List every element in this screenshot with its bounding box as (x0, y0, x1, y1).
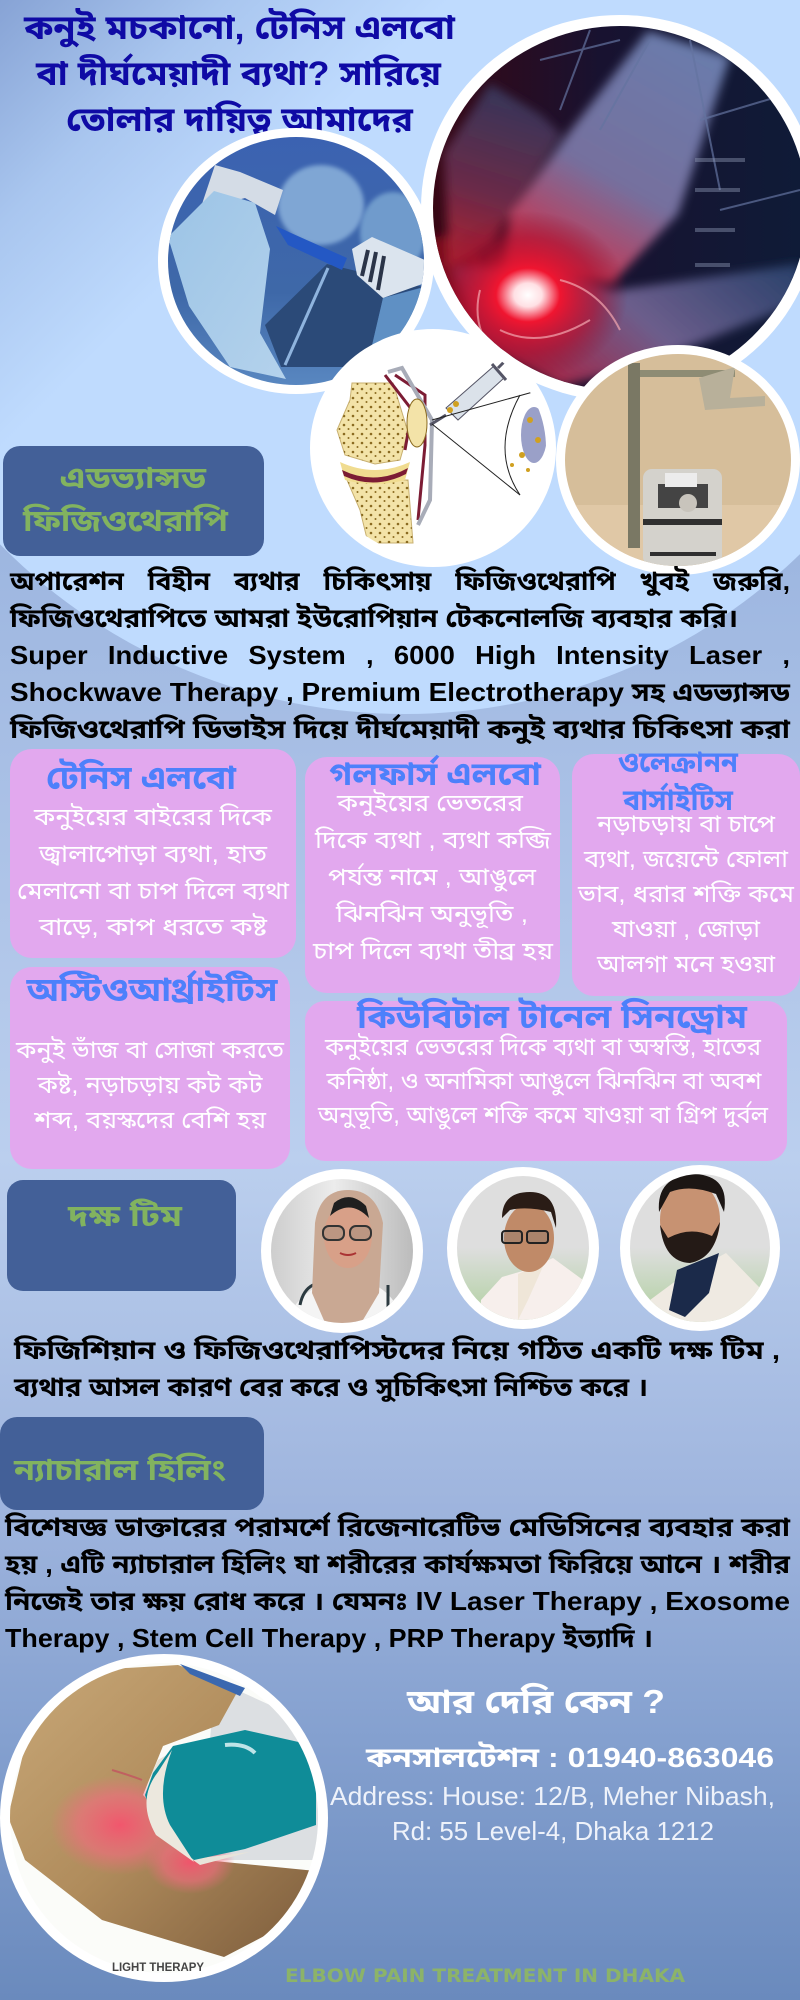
paragraph: skilled team: ফিজিশিয়ান ও ফিজিওথেরাপিস্টদের নিয়ে গঠিত একটি দক্ষ টিম , (13, 1334, 780, 1365)
card: cubital tunnel syndrome: কনুইয়ের ভেতরের দিকে ব্যথা বা অস্বস্তি, হাতের (324, 1033, 762, 1061)
paragraph: advanced physiotherapy: ফিজিওথেরাপি ডিভাইস দিয়ে দীর্ঘমেয়াদী কনুই ব্যথার চিকিৎসা করা (9, 713, 791, 746)
card: osteoarthritis: শব্দ, বয়স্কদের বেশি হয় (33, 1106, 267, 1134)
call to action: Rd: 55 Level-4, Dhaka 1212 (392, 1816, 714, 1846)
card: olecranon bursitis: যাওয়া , জোড়া (611, 916, 761, 943)
title: বা দীর্ঘমেয়াদী ব্যথা? সারিয়ে (35, 53, 442, 93)
photo: doctor 1 (260, 1169, 425, 1335)
card: golfer's elbow: পর্যন্ত নামে , আঙুলে (328, 862, 536, 893)
card: golfer's elbow: গলফার্স এলবো (329, 755, 542, 792)
call to action: কনসালটেশন : 01940-863046 (365, 1741, 774, 1773)
card: cubital tunnel syndrome (305, 998, 787, 1161)
photo: doctor 2 (445, 1165, 605, 1330)
card: cubital tunnel syndrome: কিউবিটাল টানেল সিনড্রোম (356, 998, 747, 1035)
photo: therapy machine (556, 345, 800, 575)
heading box: advanced physiotherapy (3, 446, 264, 556)
card: tennis elbow: জ্বালাপোড়া ব্যথা, হাত (38, 841, 268, 868)
footer tagline: ELBOW PAIN TREATMENT IN DHAKA (285, 1965, 685, 1987)
illustration: knee joint injection (310, 329, 556, 567)
card: olecranon bursitis: ভাব, ধরার শক্তি কমে (577, 880, 794, 908)
paragraph: advanced physiotherapy: ফিজিওথেরাপিতে আমরা ইউরোপিয়ান টেকনোলজি ব্যবহার করি। (9, 602, 738, 633)
paragraph: advanced physiotherapy (9, 565, 791, 746)
card: olecranon bursitis (572, 747, 800, 996)
card: osteoarthritis: কষ্ট, নড়াচড়ায় কট কট (36, 1071, 263, 1099)
card: cubital tunnel syndrome: অনুভূতি, আঙুলে শক্তি কমে যাওয়া বা গ্রিপ দুর্বল (317, 1100, 768, 1131)
heading box: advanced physiotherapy: এডভ্যান্সড (60, 462, 206, 495)
photo: doctor 3 (620, 1165, 785, 1331)
card: osteoarthritis: কনুই ভাঁজ বা সোজা করতে (15, 1036, 285, 1064)
paragraph: advanced physiotherapy: Shockwave Therapy , Premium Electrotherapy সহ এডভ্যান্সড (10, 677, 790, 707)
card: golfer's elbow (305, 755, 560, 993)
paragraph: advanced physiotherapy: Super Inductive System , 6000 High Intensity Laser , (10, 640, 790, 670)
card: golfer's elbow: ঝিনঝিন অনুভূতি , (335, 900, 528, 929)
card: tennis elbow: বাড়ে, কাপ ধরতে কষ্ট (38, 913, 267, 941)
paragraph: natural healing (4, 1511, 791, 1653)
card: osteoarthritis: অস্টিওআর্থ্রাইটিস (25, 970, 278, 1008)
card: olecranon bursitis: ব্যথা, জয়েন্টে ফোলা (583, 845, 789, 873)
card: tennis elbow: কনুইয়ের বাইরের দিকে (33, 803, 273, 831)
heading box: skilled team: দক্ষ টিম (67, 1198, 182, 1233)
heading box: advanced physiotherapy: ফিজিওথেরাপি (22, 503, 229, 538)
paragraph: skilled team: ব্যথার আসল কারণ বের করে ও সুচিকিৎসা নিশ্চিত করে । (13, 1371, 648, 1404)
paragraph: skilled team (13, 1334, 780, 1404)
card: olecranon bursitis: ওলেক্রানন (618, 747, 739, 779)
card: golfer's elbow: চাপ দিলে ব্যথা তীব্র হয় (312, 937, 554, 965)
title: কনুই মচকানো, টেনিস এলবো (23, 7, 455, 48)
card: olecranon bursitis: নড়াচড়ায় বা চাপে (596, 811, 776, 838)
photo: gloved hands with syringe (158, 128, 440, 400)
card: olecranon bursitis: বার্সাইটিস (622, 783, 733, 817)
call to action: আর দেরি কেন ? (406, 1683, 665, 1720)
card: tennis elbow: টেনিস এলবো (46, 759, 237, 796)
photo: glowing elbow x-ray (420, 10, 800, 410)
card: golfer's elbow: কনুইয়ের ভেতরের (336, 789, 524, 817)
paragraph: natural healing: নিজেই তার ক্ষয় রোধ করে । যেমনঃ IV Laser Therapy , Exosome (4, 1585, 790, 1616)
paragraph: natural healing: বিশেষজ্ঞ ডাক্তারের পরামর্শে রিজেনারেটিভ মেডিসিনের ব্যবহার করা (4, 1511, 791, 1542)
card: olecranon bursitis: আলগা মনে হওয়া (596, 951, 776, 978)
title: তোলার দায়িত্ব আমাদের (66, 99, 414, 139)
card: tennis elbow (10, 749, 296, 958)
card: golfer's elbow: দিকে ব্যথা , ব্যথা কব্জি (314, 826, 552, 854)
paragraph: natural healing: Therapy , Stem Cell Therapy , PRP Therapy ইত্যাদি । (5, 1622, 653, 1653)
card: tennis elbow: মেলানো বা চাপ দিলে ব্যথা (17, 877, 290, 905)
heading box: natural healing (0, 1417, 264, 1510)
title (23, 7, 455, 139)
card: osteoarthritis (10, 967, 290, 1169)
paragraph: natural healing: হয় , এটি ন্যাচারাল হিলিং যা শরীরের কার্যক্ষমতা ফিরিয়ে আনে । শরীর (4, 1548, 790, 1579)
photo: laser therapy on elbow: LIGHT THERAPY (112, 1960, 204, 1974)
heading box: skilled team (7, 1180, 236, 1291)
paragraph: advanced physiotherapy: অপারেশন বিহীন ব্যথার চিকিৎসায় ফিজিওথেরাপি খুবই জরুরি, (9, 565, 790, 598)
card: cubital tunnel syndrome: কনিষ্ঠা, ও অনামিকা আঙুলে ঝিনঝিন বা অবশ (326, 1066, 762, 1097)
heading box: natural healing: ন্যাচারাল হিলিং (13, 1452, 226, 1487)
call to action: Address: House: 12/B, Meher Nibash, (330, 1781, 775, 1811)
call to action (330, 1683, 775, 1846)
photo: laser therapy on elbow (0, 1654, 330, 1982)
